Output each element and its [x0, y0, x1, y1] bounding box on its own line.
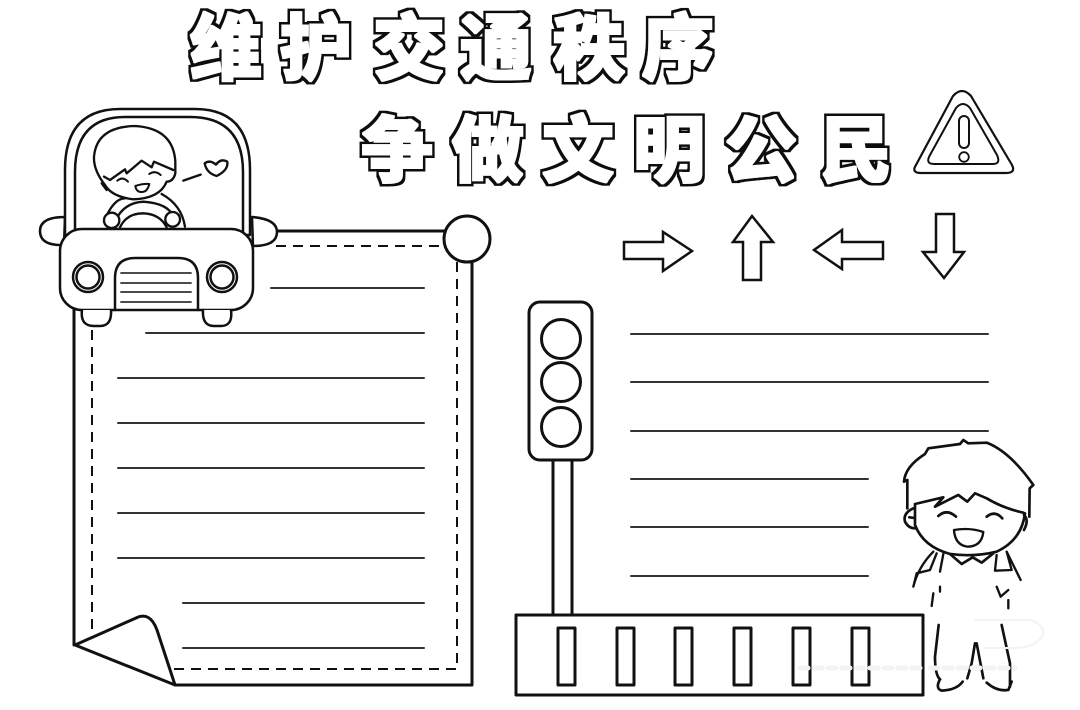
- folded corner: [75, 616, 175, 685]
- car wheels: [82, 310, 231, 326]
- boy hair outline: [904, 440, 1033, 517]
- boy fringe: [915, 493, 1023, 513]
- boy backpack straps: [913, 552, 1021, 587]
- icon: traffic light: [529, 302, 592, 614]
- boy arms: [932, 587, 1008, 608]
- traffic light lamps: [542, 320, 580, 446]
- car cabin: [65, 109, 250, 235]
- arrow: up: [733, 216, 773, 280]
- paper stitched border: [92, 246, 457, 669]
- traffic light pole: [553, 460, 572, 614]
- boy collar: [950, 553, 993, 564]
- crosswalk: [516, 615, 923, 695]
- car windshield: [75, 117, 243, 232]
- boy mouth: [954, 529, 983, 547]
- panel: notepaper with lines: [74, 216, 490, 685]
- car headlights: [73, 262, 237, 292]
- car mirrors: [40, 217, 277, 246]
- paper outline: [74, 231, 472, 685]
- driver: [94, 126, 227, 228]
- arrow: right: [624, 232, 692, 271]
- paper pin circle: [444, 216, 490, 262]
- title: line 2: 争做文明公民: [361, 112, 892, 192]
- car body: [60, 229, 253, 310]
- icon: car with driver: [40, 109, 277, 326]
- watermark: [800, 620, 1043, 668]
- boy face: [915, 505, 1025, 555]
- car grille: [115, 258, 198, 310]
- boy legs: [935, 625, 1010, 687]
- arrow: left: [814, 230, 883, 269]
- traffic light housing: [529, 302, 592, 460]
- writing lines: [118, 288, 424, 648]
- icon: boy with backpack: [904, 440, 1033, 691]
- boy ears: [905, 508, 1027, 530]
- writing lines: right: [631, 334, 988, 576]
- icon: warning triangle: [914, 91, 1013, 173]
- arrow: down: [923, 214, 964, 278]
- title: line 1: 维护交通秩序: [190, 10, 714, 90]
- boy shoes: [938, 679, 1012, 691]
